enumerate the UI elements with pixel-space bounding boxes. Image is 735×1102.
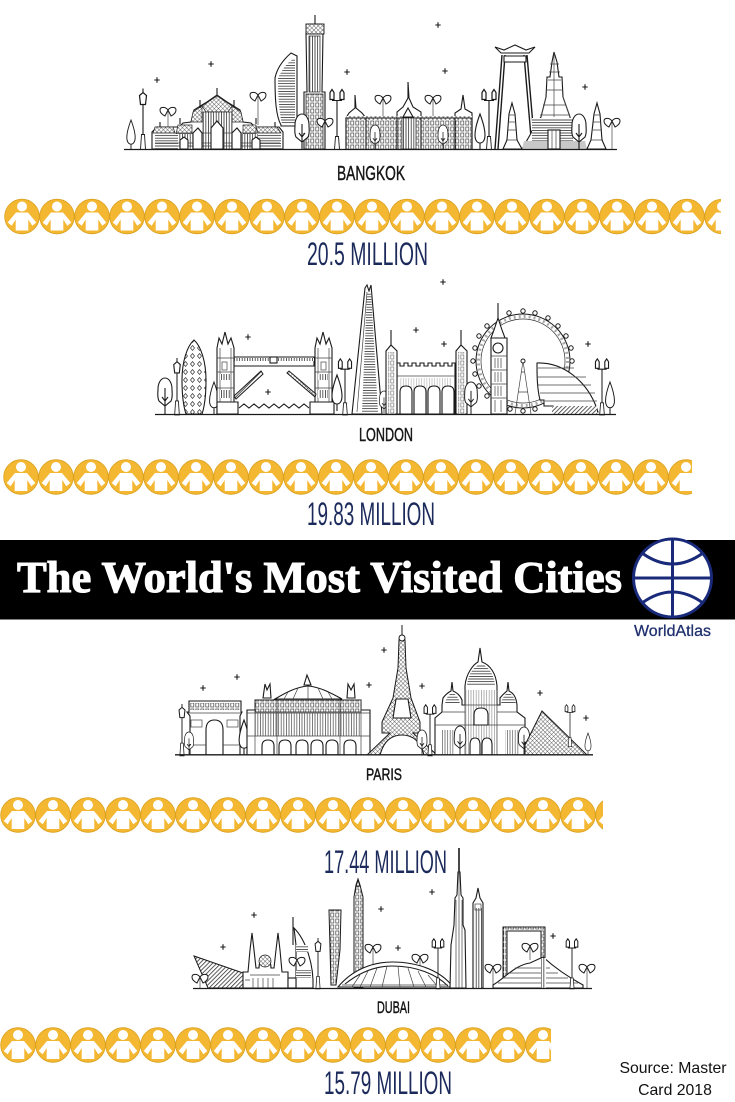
pictogram row: 15.79 million [1,1028,560,1062]
skyline: London [155,279,616,415]
Wat Arun [522,52,587,149]
title banner [0,539,735,640]
source note [619,1060,727,1099]
Burj Khalifa [450,848,466,988]
Opera [247,675,370,755]
Burj Al Arab [288,917,313,988]
value: 15.79 MILLION [324,1065,452,1101]
Louvre pyramid [525,711,587,755]
panel: London [4,279,703,532]
wedge building [194,956,243,988]
Dubai Frame [503,927,545,980]
twisted tower [329,910,341,985]
source note: Card 2018 [638,1082,712,1099]
wave tower [275,53,297,126]
stadium [338,962,453,987]
Sacre-Coeur [435,648,525,755]
Baiyoke tower [304,15,325,149]
Big Ben [491,303,507,414]
City Hall [537,363,598,414]
pictogram row: 17.44 million [1,798,630,832]
city label: DUBAI [377,999,410,1017]
Tower of London [386,330,467,414]
city label: PARIS [366,765,402,784]
London Eye [471,309,574,414]
pictogram row: 19.83 million [4,460,703,494]
small prangs [503,103,606,149]
panel: Paris [1,625,630,880]
temple [152,88,283,149]
giant swing [495,45,535,149]
domed building [493,957,583,988]
mosque [243,933,288,988]
WorldAtlas logo [634,539,712,640]
ground line [124,148,617,150]
ground line [193,988,592,990]
value: 17.44 MILLION [324,844,447,880]
title: The World's Most Visited Cities [17,553,622,602]
pictogram row: 20.5 million [5,199,735,234]
observation tower [473,888,483,988]
Eiffel Tower [367,625,437,755]
Shard [352,285,382,414]
city label: LONDON [359,425,413,445]
Arc de Triomphe [187,701,242,755]
ground line [155,414,616,416]
skyline: Bangkok [124,15,620,150]
Tower Bridge [217,332,334,414]
value: 20.5 MILLION [307,236,428,272]
skyline: Paris [175,625,593,756]
WorldAtlas logo: WorldAtlas [634,623,711,640]
value: 19.83 MILLION [307,496,435,532]
panel: Dubai [1,848,595,1101]
source note: Source: Master [619,1060,727,1077]
panel: Bangkok [5,15,735,272]
slender tower [354,879,363,988]
ground line [175,754,593,756]
palace [346,82,472,149]
city label: BANGKOK [337,162,405,185]
Gherkin [182,340,206,414]
skyline: Dubai [192,848,595,989]
